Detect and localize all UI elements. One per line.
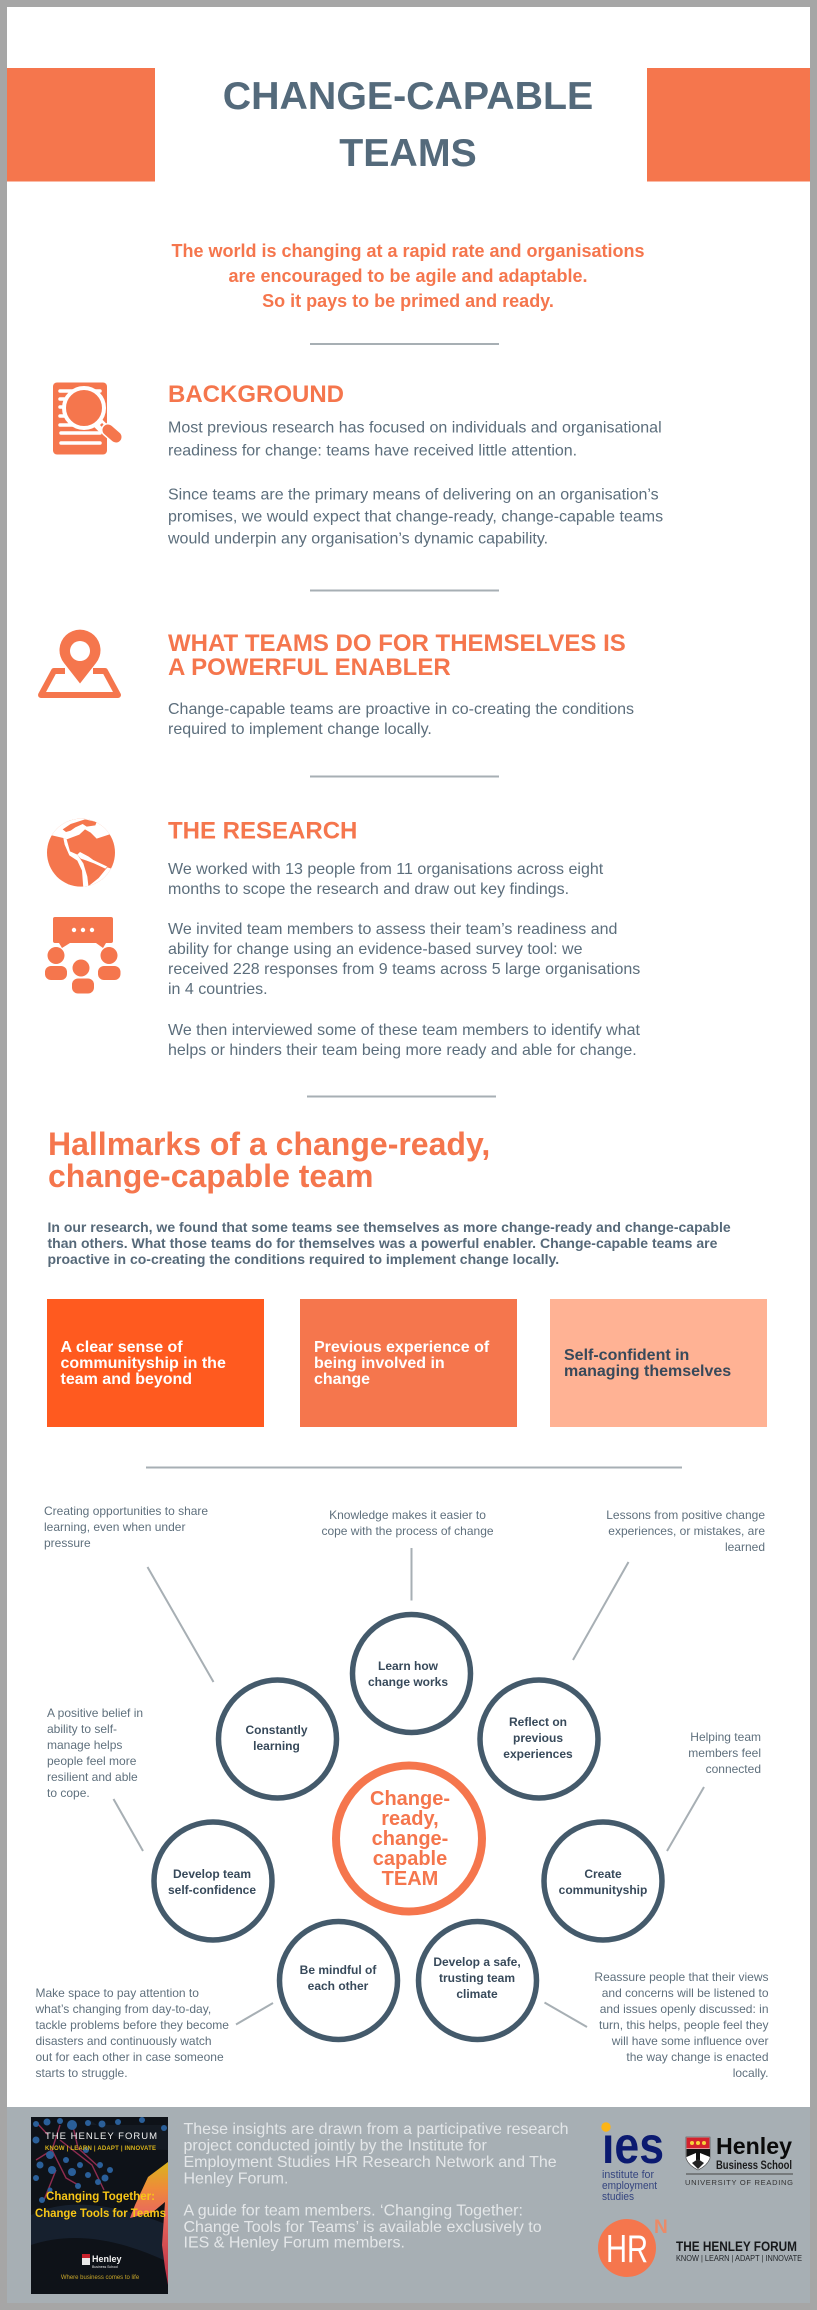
- caption: lessons: Lessons from positive change: [606, 1508, 765, 1522]
- text: background: Since teams are the primary means of delivering on an organisation’s: [168, 486, 659, 504]
- node: be mindful of each other: each other: [308, 1979, 369, 1993]
- text: the research: received 228 responses from 9 teams across 5 large organisations: [168, 961, 640, 978]
- footer text: Henley Forum.: [184, 2170, 288, 2188]
- hallmark card: communityship: [47, 1299, 264, 1427]
- caption: make space: Make space to pay attention to: [36, 1986, 199, 2000]
- logo: Henley Business School: Henley: [716, 2133, 792, 2159]
- caption: reassure people: will have some influence over: [611, 2034, 768, 2048]
- caption: make space: out for each other in case someone: [36, 2050, 224, 2064]
- hallmark card: communityship: communityship in the: [60, 1355, 226, 1372]
- centre node: change-ready team: Change-: [370, 1788, 450, 1810]
- node: reflect on previous experiences: previous: [513, 1731, 563, 1745]
- node: develop team self-confidence: self-confidence: [168, 1883, 256, 1897]
- book cover: Where business comes to life: [61, 2275, 140, 2281]
- heading: the research: THE RESEARCH: [168, 818, 357, 844]
- node: develop a safe, trusting team climate: trusting team: [439, 1971, 515, 1985]
- caption: make space: disasters and continuously watch: [36, 2034, 212, 2048]
- logo: IES: ies: [602, 2117, 664, 2175]
- title: CHANGE-CAPABLE: [223, 74, 593, 118]
- caption: reassure people: and concerns will be listened to: [602, 1986, 769, 2000]
- text: the research: in 4 countries.: [168, 981, 268, 998]
- caption: positive belief: to cope.: [47, 1786, 90, 1800]
- caption: positive belief: resilient and able: [47, 1770, 138, 1784]
- diagram: change-ready team wheel: [34, 1504, 769, 2080]
- caption: make space: starts to struggle.: [36, 2066, 128, 2080]
- node: constantly learning: [218, 1680, 336, 1798]
- text: background: readiness for change: teams have received little attention.: [168, 442, 577, 460]
- caption: helping team members: members feel: [688, 1746, 761, 1760]
- node: create communityship: Create: [584, 1867, 622, 1881]
- hallmark card: previous experience: change: [314, 1371, 370, 1388]
- logo: IES: [600, 2117, 664, 2203]
- caption: positive belief: manage helps: [47, 1738, 122, 1752]
- title: TEAMS: [339, 131, 477, 175]
- text: hallmarks introduction: proactive in co-creating the conditions required to implement change locally.: [48, 1251, 559, 1267]
- panel: background: [53, 381, 663, 548]
- hallmark card: previous experience: [300, 1299, 517, 1427]
- logo: The Henley Forum: [676, 2239, 802, 2263]
- node: reflect on previous experiences: [480, 1680, 598, 1798]
- node: create communityship: communityship: [559, 1883, 647, 1897]
- caption: positive belief: people feel more: [47, 1754, 137, 1768]
- hallmark card: self-confident: [550, 1299, 767, 1427]
- logo: The Henley Forum: THE HENLEY FORUM: [676, 2239, 797, 2254]
- caption: reassure people: and issues openly discussed: in: [600, 2002, 768, 2016]
- logo: Henley Business School: [685, 2133, 793, 2187]
- caption: reassure people: locally.: [733, 2066, 768, 2080]
- intro text: The world is changing at a rapid rate and organisations: [171, 241, 645, 261]
- caption: positive belief: ability to self-: [47, 1722, 117, 1736]
- hallmark card: self-confident: Self-confident in: [564, 1347, 689, 1364]
- centre node: change-ready team: ready,: [381, 1808, 439, 1830]
- intro text: are encouraged to be agile and adaptable.: [228, 266, 588, 286]
- caption: lessons: learned: [725, 1540, 765, 1554]
- right orange block: [647, 68, 810, 182]
- footer text: Change Tools for Teams’ is available exclusively to: [184, 2219, 542, 2236]
- logo: Henley Business School: Business School: [716, 2160, 792, 2172]
- caption: positive belief: A positive belief in: [47, 1706, 143, 1720]
- footer text: project conducted jointly by the Institute for: [184, 2138, 487, 2154]
- caption: lessons: experiences, or mistakes, are: [608, 1524, 765, 1538]
- logo: HR Network: [598, 2217, 668, 2277]
- node: develop a safe, trusting team climate: Develop a safe,: [433, 1955, 521, 1969]
- panel: footer: [7, 2107, 810, 2303]
- text: what teams do: required to implement change locally.: [168, 721, 432, 738]
- node: reflect on previous experiences: experiences: [503, 1747, 573, 1761]
- footer text: These insights are drawn from a participative research: [184, 2121, 569, 2138]
- caption: knowledge: cope with the process of change: [321, 1524, 494, 1538]
- panel: what teams do for themselves: [41, 630, 634, 738]
- book cover: Change Tools for Teams: [35, 2206, 166, 2220]
- logo: HR Network: N: [654, 2217, 668, 2238]
- footer text: A guide for team members. ‘Changing Together:: [184, 2202, 523, 2220]
- left orange block: [7, 68, 155, 182]
- heading: hallmarks: change-capable team: [48, 1158, 373, 1194]
- hallmark card: previous experience: being involved in: [314, 1355, 445, 1372]
- hallmark card: previous experience: Previous experience of: [314, 1339, 490, 1356]
- caption: knowledge: Knowledge makes it easier to: [329, 1508, 486, 1522]
- text: hallmarks introduction: than others. What those teams do for themselves was a powerful enabler. Change-capable teams are: [48, 1235, 718, 1251]
- logo: IES: studies: [602, 2191, 634, 2203]
- text: the research: We invited team members to assess their team’s readiness and: [168, 921, 617, 938]
- node: reflect on previous experiences: Reflect on: [509, 1715, 567, 1729]
- caption: creating opportunities: Creating opportunities to share: [44, 1504, 208, 1518]
- text: the research: We worked with 13 people from 11 organisations across eight: [168, 861, 604, 878]
- text: the research: helps or hinders their team being more ready and able for change.: [168, 1042, 637, 1059]
- logo: Henley Business School: UNIVERSITY OF READING: [685, 2178, 793, 2187]
- text: the research: ability for change using an evidence-based survey tool: we: [168, 941, 583, 958]
- hallmark card: communityship: team and beyond: [60, 1371, 192, 1388]
- book cover: KNOW | LEARN | ADAPT | INNOVATE: [45, 2146, 156, 2152]
- logo: The Henley Forum: KNOW | LEARN | ADAPT | INNOVATE: [676, 2254, 802, 2263]
- caption: helping team members: Helping team: [690, 1730, 761, 1744]
- node: develop a safe, trusting team climate: climate: [456, 1987, 498, 2001]
- caption: reassure people: turn, this helps, people feel they: [599, 2018, 768, 2032]
- connector lines: [114, 1548, 704, 2027]
- book cover: Business School: [92, 2265, 118, 2269]
- caption: creating opportunities: learning, even when under: [44, 1520, 185, 1534]
- icon: globe: [47, 818, 115, 887]
- heading: background: BACKGROUND: [168, 381, 344, 408]
- logo: HR Network: HR: [606, 2228, 648, 2271]
- caption: reassure people: Reassure people that their views: [594, 1970, 768, 1984]
- node: be mindful of each other: Be mindful of: [300, 1963, 377, 1977]
- heading: what teams do: A POWERFUL ENABLER: [168, 654, 451, 681]
- centre node: change-ready team: TEAM: [382, 1868, 438, 1890]
- centre node: change-ready team: change-: [372, 1828, 448, 1850]
- node: develop team self-confidence: Develop team: [173, 1867, 251, 1881]
- heading: what teams do: WHAT TEAMS DO FOR THEMSELVES IS: [168, 630, 626, 657]
- node: constantly learning: learning: [253, 1739, 300, 1753]
- text: background: would underpin any organisation’s dynamic capability.: [167, 530, 548, 548]
- panel: the research: [43, 813, 640, 1059]
- node: develop a safe, trusting team climate: [418, 1922, 536, 2040]
- icon: document with magnifier: [53, 382, 116, 454]
- node: develop team self-confidence: [154, 1822, 272, 1940]
- text: the research: We then interviewed some of these team members to identify what: [168, 1022, 640, 1039]
- book cover: Henley: [92, 2254, 122, 2264]
- book cover: Changing Together:: [46, 2189, 155, 2203]
- hallmark card: self-confident: managing themselves: [564, 1363, 731, 1380]
- icon: team discussion: [45, 917, 120, 994]
- footer text: IES & Henley Forum members.: [184, 2234, 405, 2252]
- caption: creating opportunities: pressure: [44, 1536, 91, 1550]
- text: what teams do: Change-capable teams are proactive in co-creating the conditions: [168, 701, 634, 718]
- logo: IES: employment: [602, 2180, 657, 2192]
- icon: map pin: [41, 630, 118, 695]
- text: background: Most previous research has focused on individuals and organisational: [168, 420, 662, 436]
- node: learn how change works: Learn how: [378, 1659, 439, 1673]
- heading: hallmarks: Hallmarks of a change-ready,: [48, 1126, 490, 1162]
- text: hallmarks introduction: In our research, we found that some teams see themselves as more change-ready and change-capable: [48, 1219, 731, 1235]
- centre node: change-ready team: [336, 1766, 482, 1912]
- intro text: So it pays to be primed and ready.: [262, 291, 554, 311]
- logo: IES: institute for: [602, 2169, 654, 2181]
- caption: helping team members: connected: [706, 1762, 761, 1776]
- node: learn how change works: [352, 1614, 470, 1732]
- node: learn how change works: change works: [368, 1675, 448, 1689]
- footer text: Employment Studies HR Research Network and The: [184, 2154, 557, 2171]
- hallmark card: communityship: A clear sense of: [60, 1339, 183, 1356]
- book cover: [31, 2117, 168, 2294]
- text: background: promises, we would expect that change-ready, change-capable teams: [168, 508, 663, 526]
- caption: make space: tackle problems before they become: [36, 2018, 229, 2032]
- caption: make space: what’s changing from day-to-day,: [34, 2002, 211, 2016]
- book cover: THE HENLEY FORUM: [45, 2131, 157, 2142]
- node: be mindful of each other: [280, 1922, 398, 2040]
- centre node: change-ready team: capable: [373, 1848, 447, 1870]
- caption: reassure people: the way change is enacted: [626, 2050, 768, 2064]
- text: the research: months to scope the research and draw out key findings.: [168, 881, 569, 898]
- node: constantly learning: Constantly: [245, 1723, 308, 1737]
- header band: [7, 68, 810, 182]
- node: create communityship: [544, 1822, 662, 1940]
